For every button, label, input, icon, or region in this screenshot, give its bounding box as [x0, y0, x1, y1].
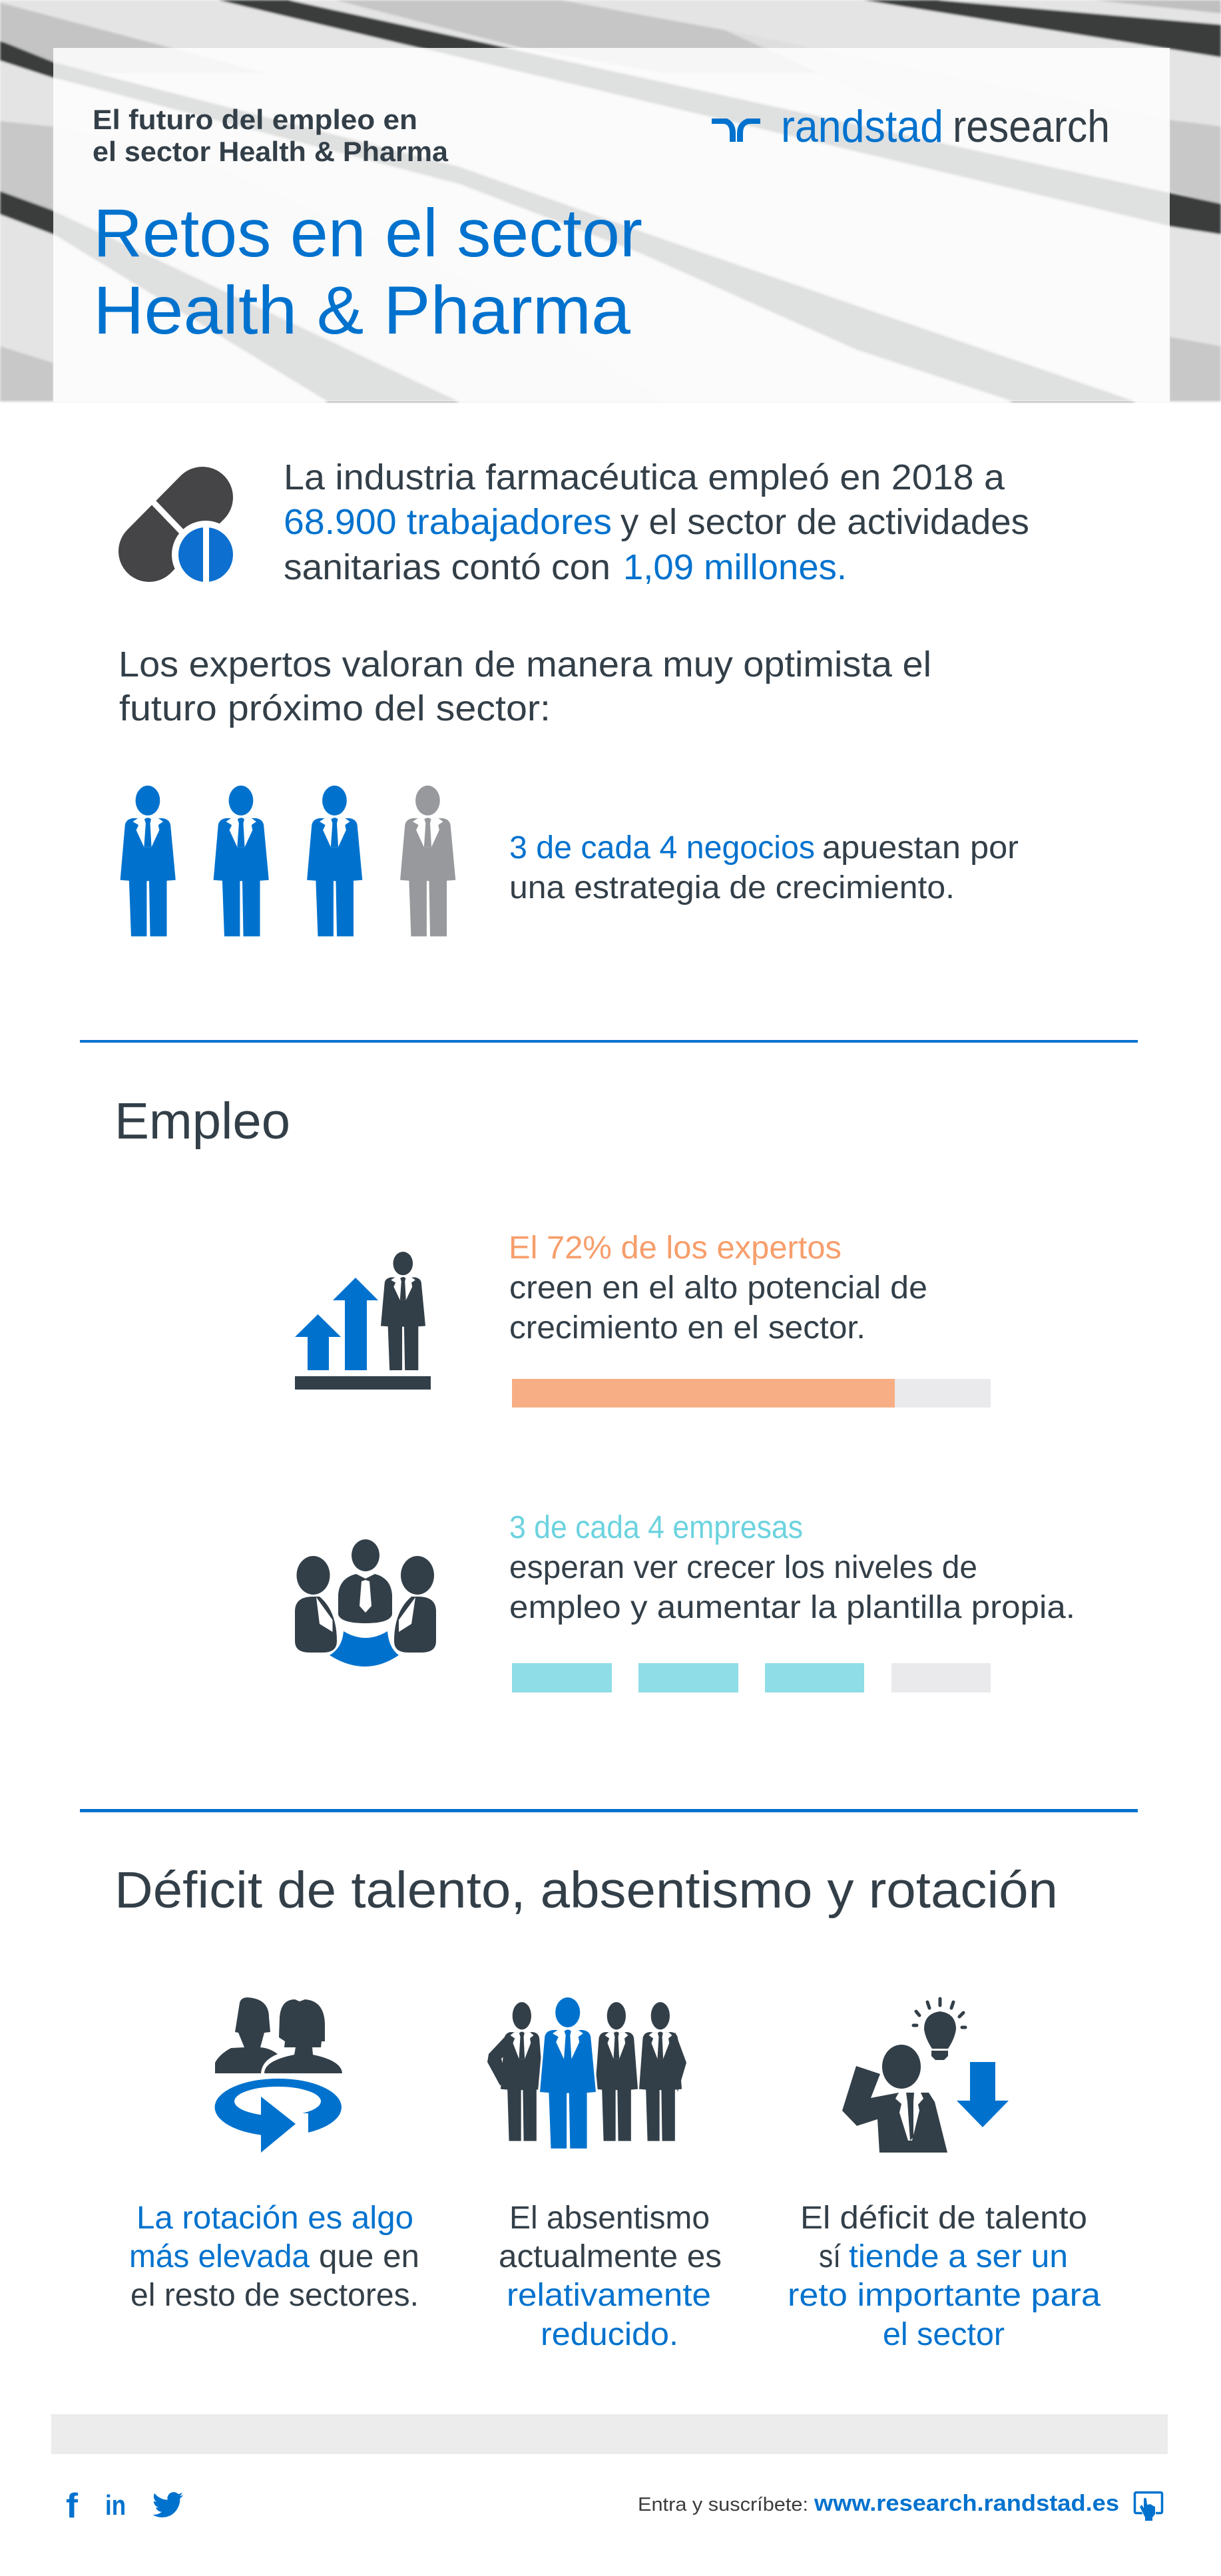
- footer link: [638, 2491, 1119, 2516]
- text: 3 de cada 4 empresas: esperan ver crecer los niveles de: [509, 1550, 977, 1585]
- text: 3 de cada 4 negocios: apuestan por: [822, 830, 1019, 866]
- title: [93, 195, 642, 348]
- logo: randstad research: randstad: [781, 101, 943, 152]
- text: experts outlook: [119, 644, 931, 728]
- footer link: Entra y suscríbete:: [638, 2494, 808, 2515]
- bar chart: 72%: [512, 1379, 991, 1408]
- text: absenteeism: actualmente es: [499, 2239, 722, 2274]
- icon: growth arrows and person: [295, 1252, 431, 1390]
- subtitle: El futuro del empleo en: [93, 104, 417, 135]
- bar chart: 3 of 4 blocks: [512, 1663, 991, 1692]
- text: experts outlook: Los expertos valoran de manera muy optimista el: [119, 644, 931, 684]
- header stairs photo: [0, 0, 1221, 401]
- text: 3 de cada 4 empresas: empleo y aumentar la plantilla propia.: [509, 1590, 1075, 1625]
- text: 3 de cada 4 negocios: una estrategia de crecimiento.: [509, 870, 955, 905]
- icon: team meeting: [295, 1539, 436, 1667]
- text: 72% de expertos: [509, 1230, 927, 1346]
- panel: header: [0, 0, 1221, 401]
- icon: tablet touch: [1134, 2493, 1162, 2521]
- social icons: f: [66, 2487, 79, 2525]
- icon: pills: [149, 497, 240, 589]
- text: employment figures: La industria farmacéutica empleó en 2018 a: [284, 457, 1005, 497]
- text: talent deficit: tiende a ser un: [849, 2239, 1068, 2274]
- icon: four people, three of four highlighted: [121, 786, 455, 936]
- text: rotation: [129, 2200, 419, 2313]
- icon: staff rotation: [214, 1997, 342, 2153]
- text: employment figures: sanitarias contó con: [284, 547, 610, 587]
- heading: Empleo: Empleo: [115, 1093, 290, 1150]
- text: 3 de cada 4 negocios: [509, 830, 1019, 905]
- text: absenteeism: relativamente: [507, 2278, 711, 2313]
- text: 72% de expertos: El 72% de los expertos: [509, 1230, 842, 1266]
- social icons: [66, 2487, 183, 2525]
- logo: randstad research: [712, 101, 1110, 152]
- text: employment figures: [284, 457, 1029, 587]
- subtitle: [93, 104, 449, 167]
- text: 3 de cada 4 negocios: 3 de cada 4 negocios: [509, 830, 815, 866]
- text: rotation: que en: [319, 2239, 419, 2274]
- logo: randstad research: research: [953, 101, 1110, 152]
- text: experts outlook: futuro próximo del sector:: [119, 688, 551, 728]
- text: 72% de expertos: crecimiento en el sector.: [509, 1310, 865, 1346]
- text: talent deficit: el sector: [883, 2317, 1005, 2352]
- text: absenteeism: reducido.: [541, 2317, 678, 2352]
- text: employment figures: 68.900 trabajadores: [284, 502, 612, 542]
- text: employment figures: y el sector de actividades: [620, 502, 1029, 542]
- social icons: in: [105, 2489, 126, 2521]
- text: absenteeism: [499, 2200, 722, 2352]
- text: 3 de cada 4 empresas: [509, 1510, 1075, 1625]
- footer band: [51, 2414, 1168, 2454]
- text: rotation: La rotación es algo: [136, 2200, 413, 2236]
- footer link: www.research.randstad.es: [814, 2491, 1119, 2516]
- text: rotation: el resto de sectores.: [130, 2278, 419, 2313]
- text: 3 de cada 4 empresas: 3 de cada 4 empresas: [509, 1510, 803, 1545]
- text: talent deficit: El déficit de talento: [800, 2200, 1087, 2236]
- title: Health & Pharma: [93, 272, 630, 348]
- text: employment figures: 1,09 millones.: [623, 547, 847, 587]
- text: absenteeism: El absentismo: [509, 2200, 710, 2236]
- text: rotation: más elevada: [129, 2239, 310, 2274]
- subtitle: el sector Health & Pharma: [93, 136, 449, 167]
- title: Retos en el sector: [93, 195, 642, 271]
- icon: talent deficit: [842, 1999, 1009, 2153]
- text: 72% de expertos: creen en el alto potencial de: [509, 1270, 927, 1306]
- text: talent deficit: [788, 2200, 1100, 2352]
- icon: team, one highlighted: [487, 1997, 686, 2149]
- heading: Déficit de talento, absentismo y rotación: Déficit de talento, absentismo y rotación: [115, 1862, 1058, 1919]
- text: talent deficit: sí: [819, 2239, 842, 2274]
- text: talent deficit: reto importante para: [788, 2278, 1100, 2313]
- translucent title panel: [53, 48, 1170, 401]
